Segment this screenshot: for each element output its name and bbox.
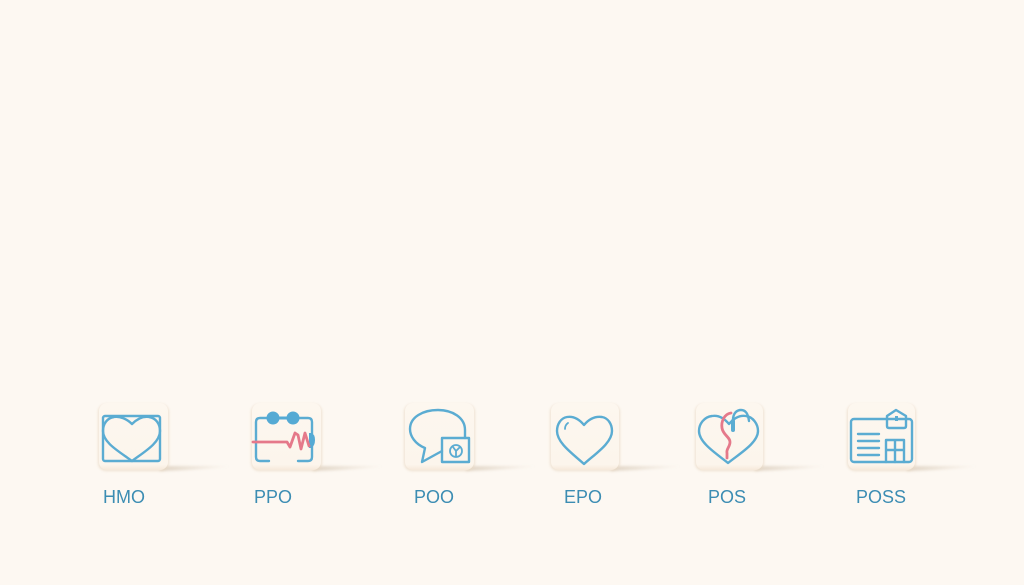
POS item [695,403,827,507]
PPO label: PPO [254,487,292,507]
POS tile shadow [755,466,827,471]
icon: heart with stethoscope [699,410,758,463]
PPO tile shadow [313,466,385,471]
POO label: POO [414,487,454,507]
EPO tile shadow [611,466,683,471]
HMO item [98,403,232,507]
POO tile shadow [466,466,538,471]
icon: heart in frame [103,416,160,461]
POO tile [404,403,475,471]
HMO tile shadow [160,466,232,471]
PPO tile [251,403,322,471]
icon: monitor with pulse line [253,412,315,461]
POSS item [847,403,979,507]
EPO label: EPO [564,487,602,507]
POS tile [695,403,764,471]
icon: speech bubble with clock [410,410,469,462]
icon: hospital building [851,410,912,462]
POO item [404,403,538,507]
EPO tile [550,403,620,471]
icon: heart [557,417,612,464]
POSS tile [847,403,916,471]
POSS label: POSS [856,487,906,507]
HMO label: HMO [103,487,145,507]
POS label: POS [708,487,746,507]
POSS tile shadow [907,466,979,471]
HMO tile [98,403,169,471]
PPO item [251,403,385,507]
EPO item [550,403,683,507]
